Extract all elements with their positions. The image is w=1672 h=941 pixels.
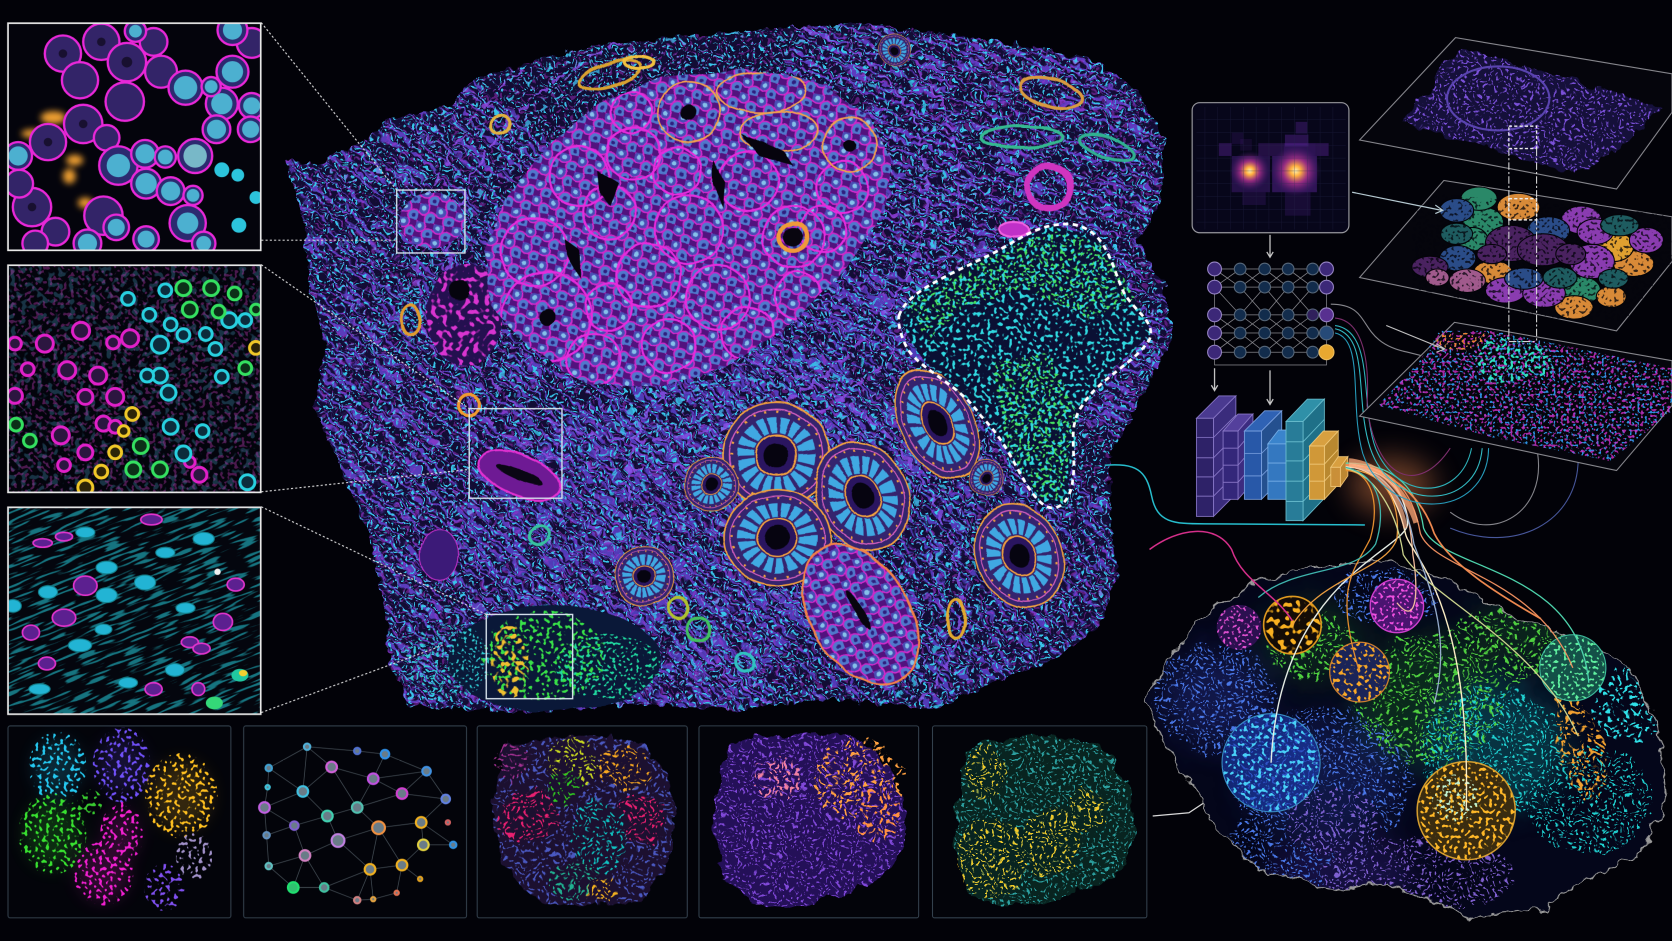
dark speckle over regions (1413, 192, 1672, 320)
panel: inset 2 multicolour rings (7, 265, 262, 495)
zoom boxes on tissue (397, 190, 573, 699)
cyan nuclei (9, 21, 260, 253)
violet input nodes (1208, 262, 1333, 359)
large magenta epithelial nest (484, 68, 892, 387)
blob speckle (715, 735, 906, 907)
graph nodes (259, 743, 456, 903)
diagram: neural network (1208, 262, 1334, 365)
panel: heat map (1192, 103, 1349, 233)
panel: bottom 4 expression heat map (699, 726, 919, 918)
teal speckle (1420, 688, 1653, 853)
cyan rings (122, 284, 255, 490)
panel: bottom 5 green yellow map (933, 726, 1147, 918)
highlighted cluster: green (1540, 635, 1606, 701)
blue speckle (1154, 570, 1440, 885)
grid lines (1196, 107, 1346, 230)
magenta rings (7, 322, 207, 482)
hot orange area (755, 740, 903, 843)
dark gaps and lumens (538, 105, 856, 325)
highlighted cluster: orange (1330, 642, 1389, 702)
dark nuclear centres (28, 38, 132, 211)
small background cells (9, 266, 260, 492)
stroma fibres left side (284, 80, 922, 714)
mosaic speckle (494, 736, 674, 906)
panel: stacked plane middle with mosaic (1360, 180, 1672, 331)
plane 3 cell points (1378, 331, 1672, 461)
green speckle (1267, 600, 1615, 765)
graph edges (264, 747, 453, 900)
orange rimmed acini (658, 72, 877, 172)
bright cyan cores without rim (214, 162, 262, 233)
tissue base colour (286, 22, 1173, 714)
concentric flow of cells around the large nest (412, 24, 961, 474)
green and yellow nuclei (206, 569, 248, 709)
orange cell debris (21, 111, 93, 208)
glow of output bundle (1349, 458, 1434, 513)
tissue fill and clusters (1141, 555, 1672, 923)
magenta elongated nuclei (22, 514, 244, 695)
arrows: network to blocks (1211, 368, 1273, 404)
green immune region inside dashed line (899, 224, 1152, 507)
purple nuclei cells (5, 24, 267, 256)
blob underlay (715, 735, 906, 907)
highlighted cluster: violet magenta (1217, 605, 1261, 650)
highlighted cluster: bright yellow (1417, 762, 1515, 860)
yellow speckle (958, 747, 1107, 899)
green cell cluster lower left (405, 606, 661, 713)
panel: inset 1 magenta cells (4, 15, 267, 257)
stroma fibres upper right (782, 22, 1173, 438)
panel: inset 3 elongated cells (0, 402, 381, 821)
acini outlines (500, 92, 868, 386)
connector: teal wire from tissue to blocks (1105, 465, 1365, 525)
yellow rings (78, 341, 262, 495)
plane 2 regions (1412, 187, 1672, 320)
arrow: panels to right tissue (1153, 798, 1211, 816)
scattered cyan nuclei (286, 23, 1173, 714)
concentric flow around lower rosette cluster (609, 348, 979, 710)
plane 1 dashed selection (1509, 126, 1537, 148)
dotted connector lines (261, 23, 486, 713)
navy hidden nodes (1234, 263, 1333, 358)
tissue outline (1146, 559, 1666, 917)
violet block 2 (1223, 414, 1253, 499)
rosette cluster lower centre (615, 34, 1081, 622)
highlighted cluster: yellow (1264, 596, 1321, 654)
heat map pixels (1219, 122, 1329, 216)
teal and green speckle (955, 738, 1135, 905)
plane 1 tissue (1403, 48, 1660, 175)
blue block 4 (1268, 430, 1297, 499)
cyan nuclei cells (4, 15, 264, 257)
violet block 1 (1196, 396, 1236, 516)
panel: bottom 1 scatter clusters (8, 726, 231, 918)
mosaic underlay (494, 736, 674, 906)
blob underlay (955, 738, 1135, 905)
blue block 3 (1244, 411, 1282, 499)
connector: pink wire to yellow cluster (1150, 531, 1292, 621)
panel: right tissue map (1141, 555, 1672, 923)
tissue structures (396, 34, 1152, 713)
bottom mixed speckle (1285, 789, 1514, 912)
highlighted cluster: blue (1222, 714, 1320, 812)
blob (715, 735, 906, 907)
arrow: network to plane 3 (1386, 325, 1445, 352)
selected patch on plane 2 (1509, 199, 1537, 220)
magenta oval nest lower centre (800, 542, 920, 686)
teal fibres (0, 402, 381, 821)
hot spots (1229, 151, 1270, 191)
tissue stroma (284, 22, 1173, 714)
green rings (10, 281, 261, 477)
small glands scattered across the stroma (401, 54, 1137, 672)
gold block 7 (1331, 457, 1348, 486)
gold output node (1319, 345, 1334, 360)
diagram: convolution blocks (1196, 396, 1348, 521)
arrow: heat map to network (1267, 235, 1273, 257)
scattered magenta nuclei (286, 22, 1173, 714)
dark colour fields (1162, 592, 1578, 901)
soft glow of clusters (25, 737, 211, 901)
cyan cluster right (1593, 666, 1670, 742)
connector: teal wires from network to plane (1331, 304, 1578, 538)
cluster points (18, 727, 218, 911)
teal block 5 (1286, 399, 1324, 521)
alignment guides between planes (1509, 148, 1537, 341)
arrow: heat map to plane 2 (1352, 192, 1443, 214)
orange elongated cluster (1543, 687, 1617, 806)
dashed outline of green region (899, 224, 1151, 508)
panel: stacked plane bottom with dots (1360, 322, 1672, 470)
blob (955, 738, 1135, 905)
network edges (1215, 269, 1327, 365)
panel: stacked plane top with tissue (1360, 38, 1672, 189)
connector: output fibre bundle (1258, 461, 1589, 811)
panel: bottom 2 cell graph (244, 726, 467, 918)
glandular rosette with dark lumen (779, 223, 807, 251)
highlighted cluster: magenta (1370, 579, 1424, 633)
mosaic blob (494, 736, 674, 906)
gold block 6 (1309, 431, 1338, 499)
cyan elongated nuclei (4, 527, 214, 694)
stroma fibres lower band (450, 252, 1120, 712)
panel: main tissue section (284, 22, 1204, 918)
left nest magenta (396, 193, 566, 580)
panel: bottom 3 region mosaic (477, 726, 687, 918)
